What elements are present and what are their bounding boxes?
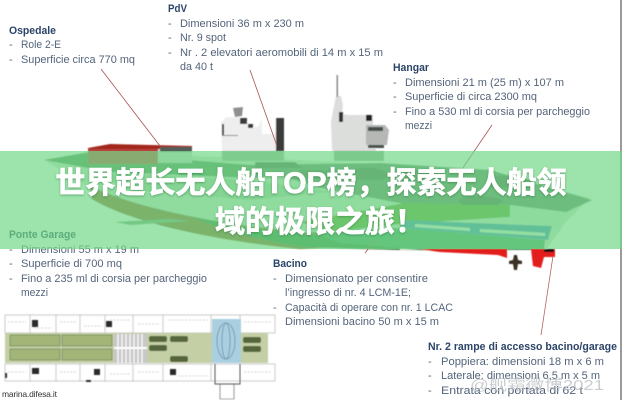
floor plan: parking bays bbox=[10, 335, 112, 360]
source credit: marina.difesa.it bbox=[2, 389, 58, 399]
text block: PdV: - bbox=[168, 32, 172, 44]
ship illustration bbox=[44, 75, 592, 270]
text block: PdV: Dimensioni 36 m x 230 m bbox=[180, 18, 304, 30]
text block: Hangar: - bbox=[393, 91, 397, 103]
text block: Ospedale bbox=[9, 25, 135, 66]
callout line: PdV bbox=[250, 70, 277, 146]
watermark: @舰霜微博2021 bbox=[470, 377, 604, 394]
ship: flight deck bbox=[240, 163, 592, 250]
text block: rampe di accesso: - bbox=[428, 370, 432, 382]
floor plan bbox=[5, 315, 275, 399]
callout line: Bacino bbox=[365, 240, 375, 253]
text block: Hangar: Fino a 530 ml di corsia per parcheggio bbox=[405, 106, 590, 118]
text block: PdV: Nr. 9 spot bbox=[180, 32, 226, 44]
text block: Ospedale: Ospedale bbox=[9, 25, 56, 37]
text block: Ospedale: Superficie circa 770 mq bbox=[21, 54, 135, 66]
ship: red hospital block bbox=[88, 144, 192, 164]
floor plan: outer structure bbox=[5, 315, 275, 399]
text block: Ospedale: - bbox=[9, 54, 13, 66]
text block: PdV: Nr . 2 elevatori aeromobili di 14 m x 15 m bbox=[180, 47, 383, 59]
ship: aft island bbox=[331, 75, 389, 161]
text block: Bacino: - bbox=[273, 273, 277, 285]
floor plan: blue well dock bbox=[212, 319, 241, 363]
text block: Bacino: Bacino bbox=[273, 258, 307, 270]
text block: Ponte Garage: - bbox=[9, 273, 13, 285]
text block: Ponte Garage: Superficie di 700 mq bbox=[21, 258, 122, 270]
ship: hull bbox=[44, 152, 590, 251]
text block: Ponte Garage: - bbox=[9, 244, 13, 256]
text block: Bacino: Dimensioni bacino 50 m x 15 m bbox=[285, 316, 439, 328]
floor plan: dark rooms bbox=[5, 320, 176, 382]
text block: Bacino: l’ingresso di nr. 4 LCM-1E; bbox=[285, 287, 411, 299]
floor plan: olive garage deck bbox=[5, 333, 268, 363]
text block: Ponte Garage: Fino a 235 ml di corsia per parcheggio bbox=[21, 273, 207, 285]
title: 世界超长无人船TOP榜，探索无人船领 bbox=[55, 167, 567, 200]
text block: Hangar: - bbox=[393, 77, 397, 89]
text block: Hangar bbox=[393, 62, 590, 132]
text block: rampe di accesso: Laterale: dimensioni 6,5 m x 5 m bbox=[441, 370, 600, 382]
ship: deck vehicles bbox=[255, 162, 536, 205]
callout line: rampe bbox=[541, 256, 553, 335]
text block: Bacino: Capacità di operare con nr. 1 LCAC bbox=[285, 302, 453, 314]
green title banner bbox=[0, 151, 622, 249]
text block: PdV: PdV bbox=[168, 3, 188, 15]
callout line: Ospedale bbox=[101, 69, 160, 146]
text block: PdV: da 40 t bbox=[180, 61, 213, 73]
text block: rampe di accesso: Nr. 2 rampe di accesso bacino/garage bbox=[428, 341, 617, 353]
ship: red keel and rudder bbox=[418, 249, 555, 270]
text block: Hangar: Dimensioni 21 m (25 m) x 107 m bbox=[405, 77, 564, 89]
floor plan: stairs area bbox=[114, 334, 147, 363]
text block: Ponte Garage: Dimensioni 55 m x 19 m bbox=[21, 244, 139, 256]
text block: rampe di accesso: - bbox=[428, 356, 432, 368]
floor plan: landing craft bbox=[149, 336, 261, 362]
text block: rampe di accesso bbox=[428, 341, 617, 397]
callout line: Hangar bbox=[441, 125, 492, 200]
text block: rampe di accesso: - bbox=[428, 385, 432, 397]
text block: Ospedale: Role 2-E bbox=[21, 39, 61, 51]
text block: rampe di accesso: Entrata con portata di 62 t bbox=[441, 385, 583, 397]
text block: Hangar: Superficie di circa 2300 mq bbox=[405, 91, 537, 103]
text block: Bacino: - bbox=[273, 302, 277, 314]
text block: Ponte Garage: Ponte Garage bbox=[9, 229, 76, 241]
text block: Ospedale: - bbox=[9, 39, 13, 51]
text block: Ponte Garage bbox=[9, 229, 207, 299]
text block: Hangar: Hangar bbox=[393, 62, 430, 74]
text block: Hangar: - bbox=[393, 106, 397, 118]
text block: PdV: - bbox=[168, 47, 172, 59]
text block: rampe di accesso: Poppiera: dimensioni 18 m x 6 m bbox=[441, 356, 604, 368]
title: 域的极限之旅！ bbox=[215, 206, 425, 239]
ship: forward island bbox=[221, 107, 284, 161]
text block: PdV: - bbox=[168, 18, 172, 30]
text block: Ponte Garage: mezzi bbox=[21, 287, 48, 299]
text block: Bacino bbox=[273, 258, 453, 328]
text block: PdV bbox=[168, 3, 383, 73]
text block: Bacino: Dimensionato per consentire bbox=[285, 273, 428, 285]
text block: Ponte Garage: - bbox=[9, 258, 13, 270]
text block: Hangar: mezzi bbox=[405, 120, 432, 132]
title bbox=[55, 167, 567, 239]
